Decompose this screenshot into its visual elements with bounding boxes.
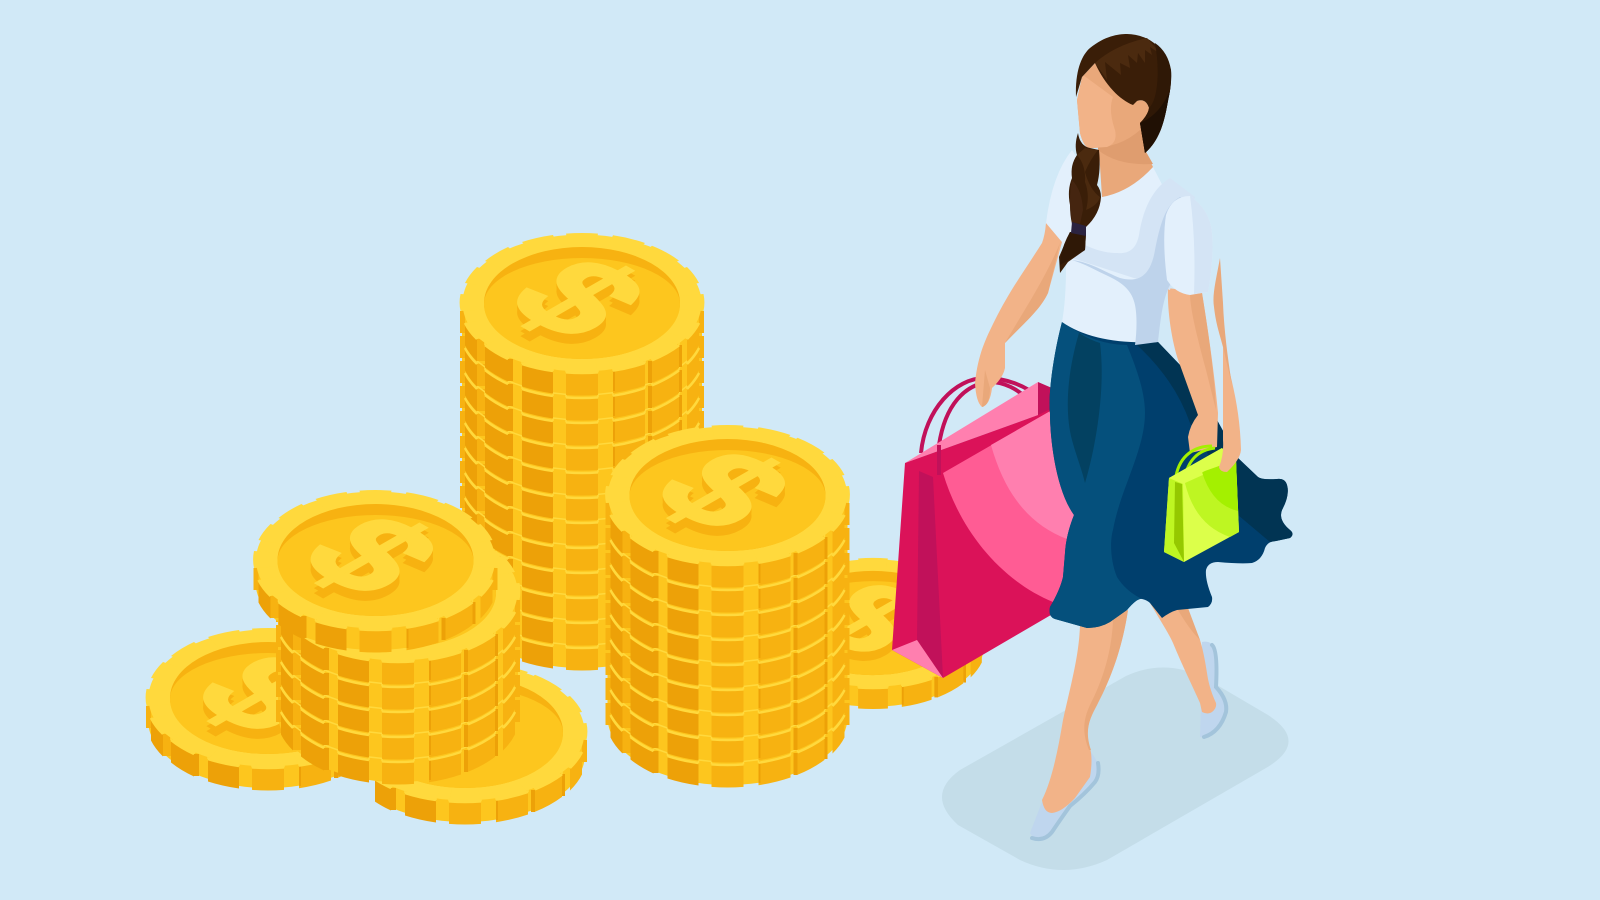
t-shirt — [1046, 150, 1212, 345]
green bag upper band — [1202, 460, 1238, 511]
tall coin stack: $ — [473, 242, 685, 363]
sleeve — [1164, 196, 1212, 295]
hair — [1076, 34, 1171, 153]
short coin stack — [276, 522, 520, 785]
flat coin bottom left: $ — [159, 632, 371, 753]
coin behind bag: $ — [772, 571, 968, 684]
flat coin bottom right — [375, 670, 588, 824]
green shopping bag — [1164, 446, 1239, 562]
braid — [1059, 133, 1101, 273]
flat coin bottom left: $ — [159, 642, 371, 763]
far arm — [1213, 258, 1241, 472]
front leg and shoe — [1030, 610, 1128, 840]
tall coin stack: $ — [473, 247, 685, 368]
bag handles — [921, 378, 1040, 475]
back leg and shoe — [1150, 603, 1226, 738]
front coin stack: $ — [619, 429, 830, 550]
single coin on short stack: $ — [267, 494, 478, 615]
skirt dark back flare — [1137, 342, 1292, 542]
flat coin bottom left — [146, 628, 390, 791]
bag side fold — [917, 471, 943, 678]
front coin stack — [605, 425, 850, 788]
hair highlight — [1095, 38, 1162, 80]
coin behind bag: $ — [772, 566, 968, 679]
green bag handles — [1176, 446, 1215, 480]
skirt — [1050, 322, 1292, 628]
left arm holding bag — [975, 223, 1062, 407]
skirt front panel — [1050, 322, 1145, 628]
bag light pink band — [991, 394, 1080, 548]
single coin on short stack — [253, 490, 498, 653]
front coin stack: $ — [619, 434, 830, 555]
pink shopping bag — [892, 378, 1080, 678]
front coin stack: $ — [619, 439, 830, 560]
coin behind bag — [759, 558, 987, 709]
hair shadow — [1140, 43, 1171, 153]
flat coin bottom left: $ — [159, 637, 371, 758]
skirt fold — [1068, 333, 1102, 483]
illustration: coins and shopper — [146, 34, 1292, 870]
green bag side — [1164, 478, 1184, 562]
head and face — [1077, 63, 1149, 148]
tall coin stack: $ — [473, 237, 685, 358]
hair band — [1071, 222, 1086, 236]
ground shadow — [942, 667, 1289, 870]
tall coin stack — [460, 233, 704, 671]
near arm — [1168, 288, 1218, 453]
green bag mid band — [1185, 460, 1239, 537]
face front — [1077, 75, 1116, 148]
single coin on short stack: $ — [267, 499, 478, 620]
shirt mid shade — [1072, 178, 1195, 290]
single coin on short stack: $ — [267, 504, 478, 625]
shirt darker shade — [1072, 197, 1190, 345]
coin behind bag: $ — [772, 562, 968, 674]
bag mid pink band — [943, 394, 1080, 610]
neck — [1098, 115, 1153, 197]
